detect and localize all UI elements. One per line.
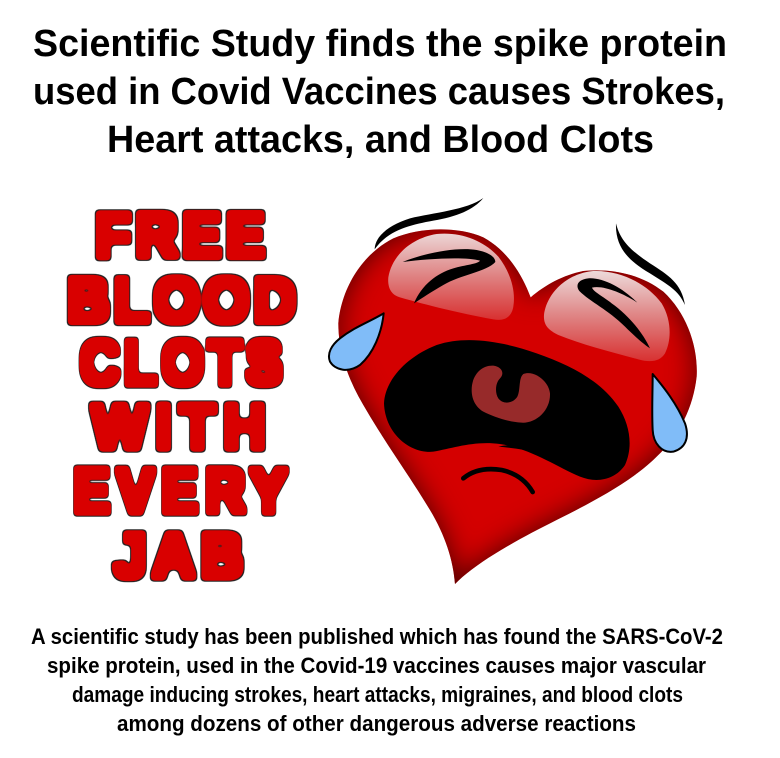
title: used in Covid Vaccines causes Strokes, xyxy=(33,71,725,113)
slogan: free blood clots with every jab xyxy=(67,200,296,590)
slogan: free blood clots with every jab: FREE xyxy=(95,200,265,270)
left eyebrow xyxy=(375,198,483,249)
slogan: free blood clots with every jab: JAB xyxy=(114,521,243,590)
slogan: free blood clots with every jab: CLOTS xyxy=(80,329,282,398)
mouth xyxy=(384,340,630,480)
left closed eye xyxy=(403,249,495,303)
right tear xyxy=(652,374,687,452)
slogan: free blood clots with every jab: BLOOD xyxy=(67,265,296,335)
body text: among dozens of other dangerous adverse reactions xyxy=(117,711,636,736)
upper lip crease xyxy=(498,445,539,454)
right closed eye xyxy=(577,278,650,348)
heart body xyxy=(338,229,697,584)
slogan: free blood clots with every jab: EVERY xyxy=(73,457,287,526)
lower lip xyxy=(463,469,533,492)
icon: crying heart xyxy=(329,198,697,584)
body text: damage inducing strokes, heart attacks, migraines, and blood clots xyxy=(72,682,683,707)
body text: spike protein, used in the Covid-19 vaccines causes major vascular xyxy=(47,653,706,678)
body text xyxy=(31,624,723,736)
left eye highlight xyxy=(388,234,514,320)
left tear xyxy=(329,313,384,370)
tongue xyxy=(472,366,550,423)
title: Heart attacks, and Blood Clots xyxy=(107,119,654,161)
body text: A scientific study has been published which has found the SARS-CoV-2 xyxy=(31,624,723,649)
slogan: free blood clots with every jab: WITH xyxy=(92,392,266,461)
right eyebrow xyxy=(616,223,685,305)
title xyxy=(33,23,727,161)
title: Scientific Study finds the spike protein xyxy=(33,23,727,65)
right eye highlight xyxy=(544,271,670,361)
